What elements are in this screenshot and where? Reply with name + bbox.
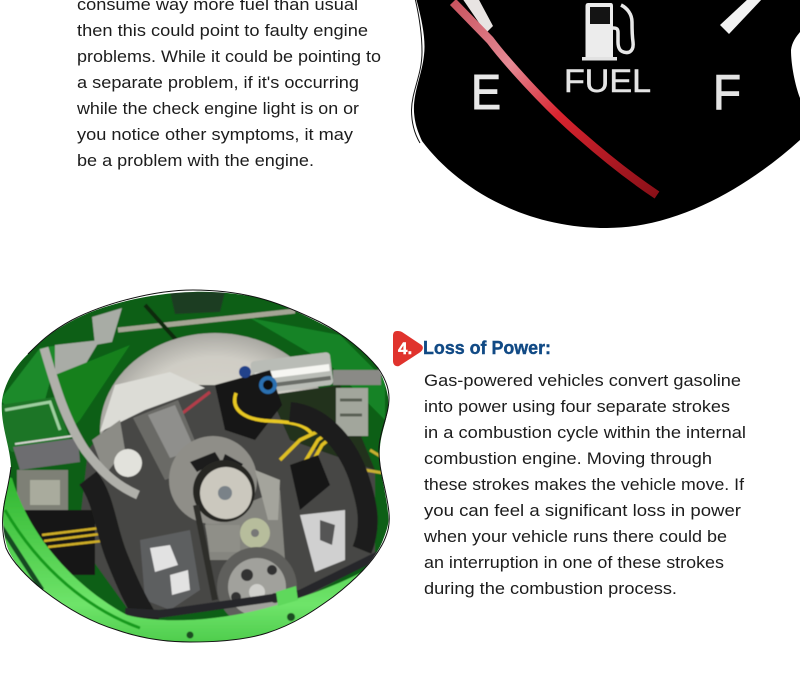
left air filter green [0,397,70,452]
alternator face [169,436,257,524]
section heading: Loss of Power [393,331,551,366]
dark rubber seal [125,552,385,614]
chrome engine block [140,530,200,610]
yellow fuel lines [42,528,102,547]
white tick right [720,0,763,34]
gauge label F: F [713,66,741,120]
text block: loss of power paragraph: during the combustion process. [424,579,677,598]
text block: fuel consumption paragraph [76,0,381,170]
icon: red play badge [393,331,423,366]
fuel gauge image [412,0,800,228]
gauge label E: E [471,66,501,120]
engine outline [3,290,389,642]
top rail and fittings [118,311,295,330]
gauge dial [414,0,800,228]
text block: fuel consumption paragraph: while the check engine light is on or [76,99,359,118]
bright green hood lip [3,477,360,642]
text block: fuel consumption paragraph: problems. While it could be pointing to [77,47,381,66]
alternator pulley [193,460,255,522]
engine bay green backdrop [2,292,388,622]
left carburetor [16,469,69,511]
text block: loss of power paragraph: you can feel a significant loss in power [424,501,741,520]
text block: fuel consumption paragraph: you notice other symptoms, it may [77,125,354,144]
right carburetor and air filter [333,370,381,385]
text block: loss of power paragraph: an interruption in one of these strokes [424,553,724,572]
gauge outline [412,0,422,143]
left black hose [88,478,150,625]
bracket [205,525,240,552]
left filter mesh [13,438,80,470]
icon: fuel pump [582,3,633,60]
text block: fuel consumption paragraph: a separate problem, if it's occurring [77,73,359,92]
alternator body [133,400,194,480]
filler cap [114,449,142,477]
grey backing disc [99,332,320,434]
text block: loss of power paragraph: combustion engine. Moving through [424,449,712,468]
small idler pulley [240,518,270,548]
text block: loss of power paragraph: in a combustion cycle within the internal [424,423,746,442]
heading text: Loss of Power: [423,338,551,358]
fan belt [196,505,215,600]
central engine mass [78,385,375,612]
badge number: 4. [398,339,412,358]
braided hose [44,348,138,495]
right black hose [290,412,368,550]
white tick left [462,0,493,33]
text block: fuel consumption paragraph: be a problem with the engine. [77,151,314,170]
crank pulley [216,546,297,616]
chrome cylinder [250,352,334,394]
text block: loss of power paragraph [423,371,746,598]
gauge label FUEL: FUEL [564,63,651,99]
engine photo [0,285,395,660]
text block: loss of power paragraph: Gas-powered vehicles convert gasoline [424,371,741,390]
text block: loss of power paragraph: these strokes makes the vehicle move. If [424,475,744,494]
dark wiring cluster [215,370,282,440]
text block: fuel consumption paragraph: then this could point to faulty engine [77,21,368,40]
ignition coil block [290,455,330,510]
text block: loss of power paragraph: into power using four separate strokes [424,397,730,416]
text block: loss of power paragraph: when your vehicle runs there could be [423,527,727,546]
gauge needle [453,2,657,195]
